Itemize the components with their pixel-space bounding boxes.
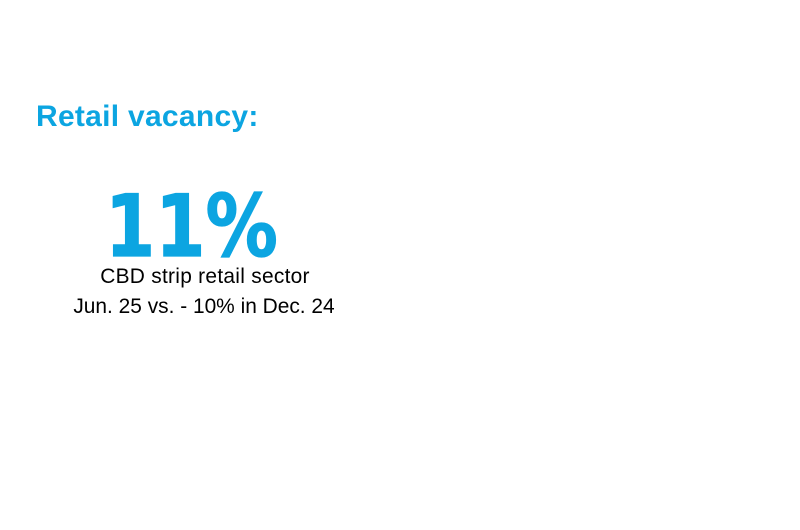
heading: Retail vacancy: [36, 100, 259, 133]
description line 1: CBD strip retail sector [100, 265, 310, 288]
big number: 11% [105, 177, 278, 277]
description text [73, 265, 335, 318]
description line 2: Jun. 25 vs. - 10% in Dec. 24 [73, 294, 335, 318]
